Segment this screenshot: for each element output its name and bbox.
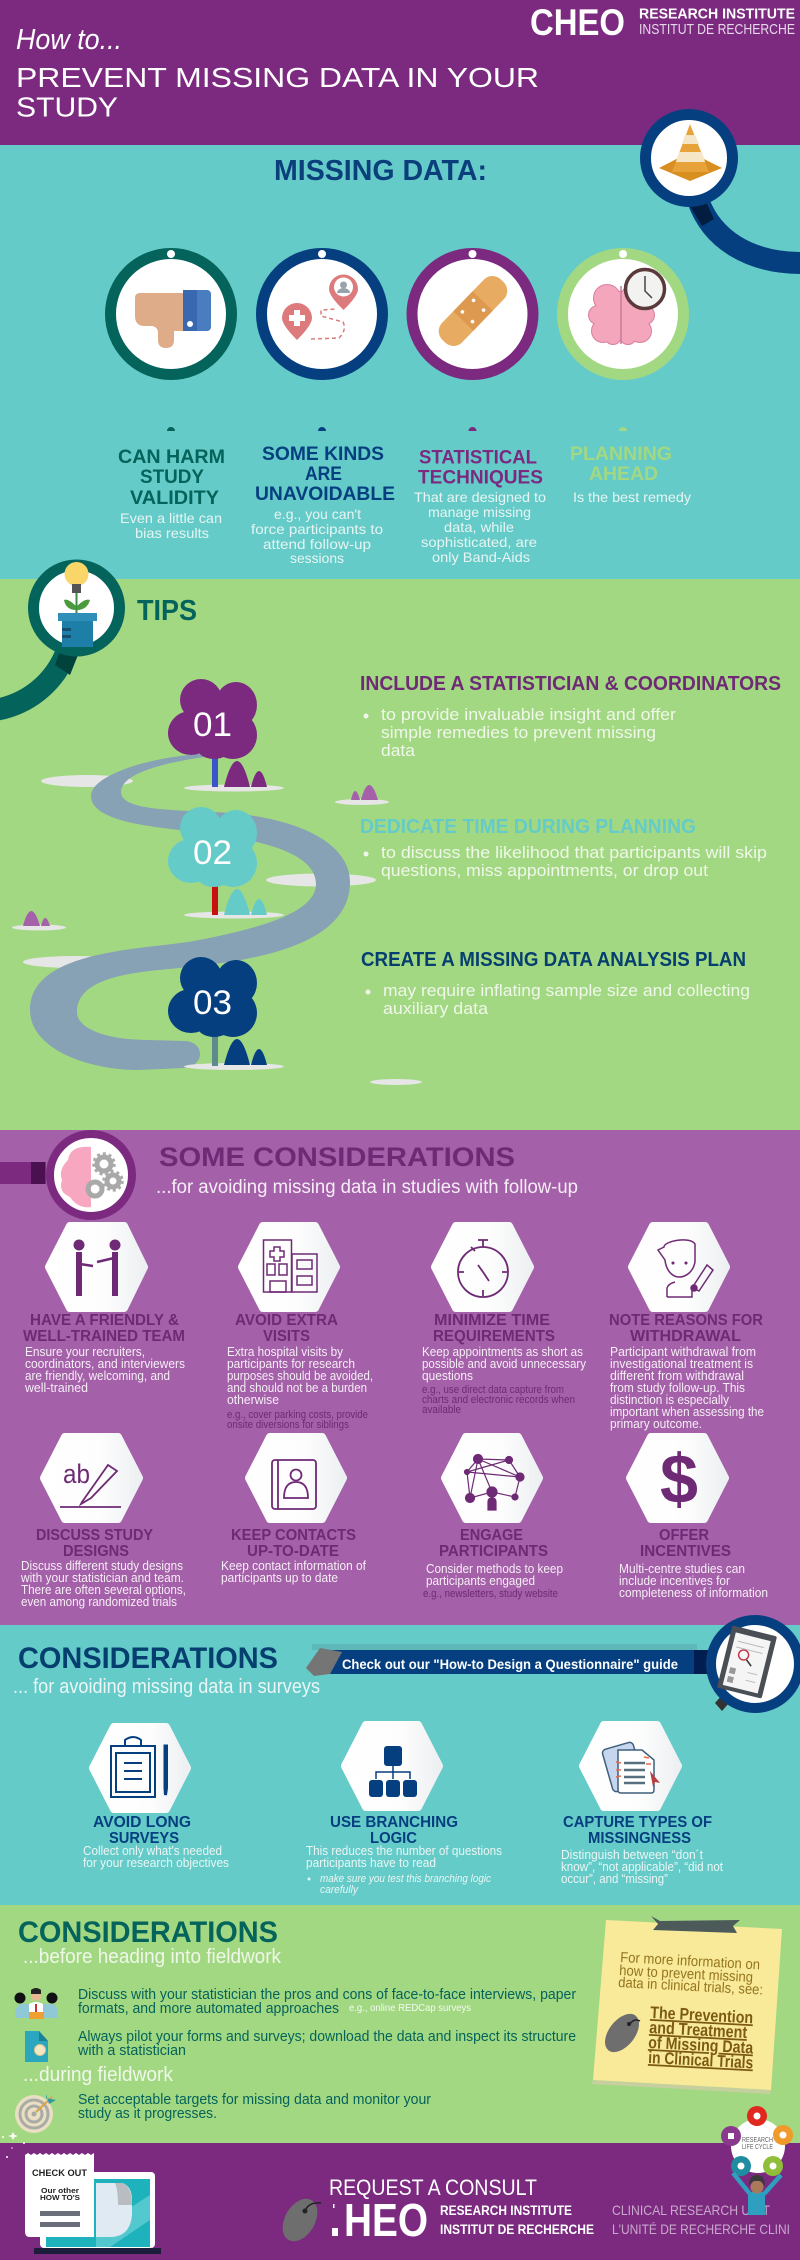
label: some kinds: ARE bbox=[305, 464, 342, 485]
text: that are designed: only Band-Aids bbox=[432, 549, 530, 565]
card: discuss study designs: with your statistician and team. bbox=[20, 1570, 184, 1585]
text: pilot forms: with a statistician bbox=[77, 2043, 186, 2059]
card: avoid long surveys: AVOID LONG bbox=[93, 1814, 191, 1831]
text: even a little bbox=[120, 510, 222, 541]
card: offer incentives: OFFER bbox=[659, 1527, 709, 1544]
card: keep contacts bbox=[221, 1437, 366, 1585]
text: e.g. you can't: sessions bbox=[290, 550, 344, 566]
icon: brain gears badge bbox=[0, 1134, 132, 1216]
tip 1 text: simple remedies to prevent missing bbox=[381, 723, 656, 742]
text: even a little: Even a little can bbox=[120, 510, 222, 526]
heading: some considerations: SOME CONSIDERATIONS bbox=[159, 1142, 515, 1172]
subheading: surveys: ... for avoiding missing data in surveys bbox=[13, 1676, 320, 1698]
heading: request a consult: REQUEST A CONSULT bbox=[329, 2175, 537, 2200]
banner: questionnaire guide bbox=[306, 1644, 709, 1676]
logo: CHEO research institute: CHEO bbox=[530, 2, 625, 43]
card: reasons for withdrawal: Participant withdrawal from bbox=[610, 1344, 756, 1359]
icon: contact book bbox=[272, 1460, 316, 1509]
card: use branching logic: This reduces the number of questions bbox=[306, 1843, 502, 1858]
tip 3 text bbox=[361, 949, 750, 1018]
text: that are designed bbox=[414, 489, 546, 565]
card: use branching logic: USE BRANCHING bbox=[330, 1814, 458, 1831]
sticky note: of Missing Data bbox=[648, 2033, 754, 2058]
card: discuss study designs: There are often several options, bbox=[21, 1582, 186, 1597]
sticky note: and Treatment bbox=[649, 2018, 748, 2042]
tip 1 text: to provide invaluable insight and offer bbox=[381, 705, 676, 724]
title: main heading: PREVENT MISSING DATA IN YOUR bbox=[16, 62, 539, 93]
heading: considerations: CONSIDERATIONS bbox=[18, 1916, 278, 1949]
icon: location pins bbox=[282, 274, 358, 340]
icon: ab and pencil: ab bbox=[63, 1459, 90, 1489]
card: offer incentives: include incentives for bbox=[619, 1573, 731, 1588]
card: engage participants: ENGAGE bbox=[460, 1527, 523, 1544]
icon: band-aid bbox=[434, 271, 512, 351]
card: minimize time: MINIMIZE TIME bbox=[434, 1312, 550, 1329]
card: discuss study designs: even among randomized trials bbox=[21, 1594, 177, 1609]
icon: document stack bbox=[602, 1741, 660, 1793]
text: that are designed: manage missing bbox=[428, 504, 531, 520]
text: best remedy: Is the best remedy bbox=[573, 489, 691, 505]
card: friendly team: HAVE A FRIENDLY & bbox=[30, 1312, 179, 1329]
text: acceptable targets bbox=[78, 2092, 431, 2122]
tree 03 bbox=[168, 957, 284, 1070]
sticky note: The Prevention bbox=[650, 2003, 754, 2027]
card: minimize time bbox=[422, 1226, 586, 1416]
tree 03: 03 bbox=[193, 984, 232, 1022]
heading: missing data: MISSING DATA: bbox=[274, 155, 487, 187]
icon: research life cycle bbox=[721, 2106, 793, 2215]
card: avoid extra visits: participants for research bbox=[227, 1356, 355, 1371]
text: discuss with statistician: formats, and more automated approaches bbox=[78, 2001, 339, 2017]
card: avoid long surveys: for your research objectives bbox=[83, 1855, 229, 1870]
label: some kinds: SOME KINDS bbox=[262, 444, 384, 465]
card: engage participants: PARTICIPANTS bbox=[439, 1543, 548, 1560]
icon: document bbox=[25, 2031, 48, 2062]
card: avoid extra visits: and should not be a burden bbox=[227, 1380, 367, 1395]
icon: laptop and receipt bbox=[25, 2153, 161, 2254]
text: research institute bbox=[440, 2202, 594, 2237]
icon: mouse bbox=[276, 2193, 324, 2247]
icon: stopwatch bbox=[458, 1240, 508, 1297]
card: minimize time: Keep appointments as short as bbox=[422, 1344, 583, 1359]
card: minimize time: questions bbox=[422, 1368, 473, 1383]
icon: three people bbox=[14, 1988, 58, 2019]
title: how to: How to... bbox=[16, 24, 122, 56]
icon: target bbox=[15, 2094, 56, 2133]
text: discuss with statistician: Discuss with your statistician the pros and cons of face-to-face interviews, paper bbox=[78, 1987, 576, 2003]
icon: plant badge bbox=[0, 562, 120, 710]
card: avoid extra visits: AVOID EXTRA bbox=[235, 1312, 338, 1329]
card: capture types of missingness: know”, “not applicable”, “did not bbox=[561, 1859, 723, 1874]
label: can harm: CAN HARM bbox=[118, 447, 225, 468]
card: engage participants: e.g., newsletters, study website bbox=[423, 1588, 558, 1600]
icon: hospital bbox=[264, 1240, 317, 1292]
card: minimize time: possible and avoid unnecessary bbox=[422, 1356, 586, 1371]
card: discuss study designs bbox=[20, 1437, 186, 1609]
item: planning ahead bbox=[562, 250, 691, 505]
label: can harm: VALIDITY bbox=[130, 488, 219, 509]
label: can harm bbox=[118, 447, 225, 509]
card: offer incentives: INCENTIVES bbox=[640, 1543, 731, 1560]
icon: brain and clock bbox=[589, 270, 664, 344]
icon: traffic cone badge bbox=[646, 114, 800, 263]
card: capture types of missingness: Distinguish between “don´t bbox=[561, 1847, 703, 1862]
card: reasons for withdrawal: from study follow-up. This bbox=[610, 1380, 745, 1395]
text: e.g. you can't bbox=[251, 506, 383, 566]
card: reasons for withdrawal: WITHDRAWAL bbox=[630, 1328, 741, 1345]
text: pilot forms bbox=[77, 2029, 576, 2059]
card: reasons for withdrawal bbox=[609, 1226, 764, 1431]
item: can harm study validity bbox=[110, 250, 232, 541]
card: keep contacts: UP-TO-DATE bbox=[247, 1543, 339, 1560]
text: that are designed: sophisticated, are bbox=[421, 534, 537, 550]
tip 1 text: INCLUDE A STATISTICIAN & COORDINATORS bbox=[360, 673, 781, 695]
card: capture types of missingness: CAPTURE TYPES OF bbox=[563, 1814, 712, 1831]
icon: dollar sign: $ bbox=[660, 1440, 698, 1518]
text: e.g. you can't: force participants to bbox=[251, 521, 383, 537]
panel: tips bbox=[0, 562, 800, 1130]
tip 2 text bbox=[360, 816, 767, 880]
card: friendly team: well-trained bbox=[24, 1380, 88, 1395]
label: some kinds bbox=[255, 444, 395, 505]
card: avoid long surveys: Collect only what's needed bbox=[83, 1843, 222, 1858]
panel: missing data bbox=[0, 114, 800, 579]
card: reasons for withdrawal: NOTE REASONS FOR bbox=[609, 1312, 763, 1329]
card: keep contacts: KEEP CONTACTS bbox=[231, 1527, 356, 1544]
text: research institute: RESEARCH INSTITUTE bbox=[440, 2202, 572, 2218]
text: discuss with statistician bbox=[78, 1987, 576, 2017]
logo: CHEO research institute bbox=[530, 2, 795, 43]
label: planning ahead: PLANNING bbox=[570, 444, 672, 465]
card: engage participants bbox=[423, 1437, 563, 1600]
card: capture types of missingness: occur”, and “missing” bbox=[561, 1871, 668, 1886]
card: reasons for withdrawal: different from withdrawal bbox=[610, 1368, 744, 1383]
title: main heading: STUDY bbox=[16, 92, 118, 122]
card: engage participants: Consider methods to keep bbox=[426, 1561, 563, 1576]
card: friendly team: Ensure your recruiters, bbox=[25, 1344, 145, 1359]
sticky note: data in clinical trials, see: bbox=[618, 1975, 763, 1999]
icon: clipboard badge bbox=[711, 1620, 799, 1711]
small bushes bbox=[23, 785, 378, 926]
tip 3 text: CREATE A MISSING DATA ANALYSIS PLAN bbox=[361, 949, 746, 971]
card: avoid long surveys: SURVEYS bbox=[109, 1830, 179, 1847]
card: capture types of missingness: MISSINGNESS bbox=[588, 1830, 691, 1847]
card: use branching logic bbox=[306, 1725, 502, 1896]
subheading: before heading: ...before heading into fieldwork bbox=[23, 1946, 282, 1968]
title: main heading bbox=[16, 62, 539, 122]
card: discuss study designs: Discuss different study designs bbox=[21, 1558, 183, 1573]
subheading: during fieldwork: ...during fieldwork bbox=[23, 2064, 174, 2086]
tip 2 text: DEDICATE TIME DURING PLANNING bbox=[360, 816, 696, 838]
label: statistical techniques: TECHNIQUES bbox=[418, 468, 543, 488]
card: reasons for withdrawal: distinction is especially bbox=[610, 1392, 729, 1407]
card: use branching logic: participants have to read bbox=[306, 1855, 436, 1870]
sticky note: in Clinical Trials bbox=[648, 2048, 754, 2072]
icon: laptop and receipt: HOW TO'S bbox=[40, 2193, 80, 2202]
tip 1 text bbox=[360, 673, 781, 760]
sticky note bbox=[592, 1916, 782, 2094]
card: avoid extra visits: purposes should be avoided, bbox=[227, 1368, 373, 1383]
tip 3 text: auxiliary data bbox=[383, 999, 489, 1018]
subheading: ...for avoiding missing data in studies with follow-up bbox=[156, 1177, 578, 1198]
icon: org chart bbox=[369, 1746, 417, 1797]
tip 2 text: questions, miss appointments, or drop out bbox=[381, 861, 708, 880]
text: even a little: bias results bbox=[135, 525, 209, 541]
icon: network bbox=[464, 1454, 524, 1510]
card: offer incentives: completeness of information bbox=[619, 1585, 768, 1600]
card: offer incentives: Multi-centre studies can bbox=[619, 1561, 745, 1576]
text: e.g. you can't: e.g., you can't bbox=[274, 506, 361, 522]
card: minimize time: charts and electronic records when bbox=[422, 1394, 575, 1406]
tip 1 text: data bbox=[381, 741, 416, 760]
card: avoid long surveys bbox=[83, 1727, 229, 1870]
text: e.g. you can't: attend follow-up bbox=[263, 536, 371, 552]
icon: two people bbox=[74, 1240, 120, 1296]
text: pilot forms: Always pilot your forms and surveys; download the data and inspect its structure bbox=[78, 2029, 576, 2045]
card: discuss study designs: DESIGNS bbox=[63, 1543, 129, 1560]
label: some kinds: UNAVOIDABLE bbox=[255, 484, 395, 505]
card: use branching logic: LOGIC bbox=[370, 1830, 417, 1847]
icon: laptop and receipt: Our other bbox=[41, 2186, 79, 2195]
tree 01 bbox=[168, 679, 284, 792]
tip 2 text: to discuss the likelihood that participants will skip bbox=[381, 843, 767, 862]
label: statistical techniques bbox=[418, 448, 543, 488]
card: reasons for withdrawal: investigational treatment is bbox=[610, 1356, 753, 1371]
text: online REDCap: e.g., online REDCap surveys bbox=[349, 2002, 471, 2014]
item: statistical techniques bbox=[412, 250, 546, 565]
card: friendly team: are friendly, welcoming, and bbox=[25, 1368, 170, 1383]
tree 01: 01 bbox=[193, 706, 232, 744]
icon: research life cycle: LIFE CYCLE bbox=[742, 2142, 773, 2151]
card: friendly team bbox=[23, 1226, 185, 1395]
card: avoid extra visits: onsite diversions for siblings bbox=[227, 1419, 349, 1431]
banner: questionnaire guide: Check out our "How-to Design a Questionnaire" guide bbox=[342, 1656, 678, 1672]
label: planning ahead: AHEAD bbox=[589, 464, 658, 485]
tree 02: 02 bbox=[193, 834, 232, 872]
card: discuss study designs: DISCUSS STUDY bbox=[36, 1527, 153, 1544]
icon: laptop and receipt: CHECK OUT bbox=[32, 2168, 88, 2178]
text: acceptable targets: study as it progresses. bbox=[78, 2106, 217, 2122]
card: avoid extra visits: e.g., cover parking costs, provide bbox=[227, 1409, 368, 1421]
card: avoid extra visits: otherwise bbox=[227, 1392, 279, 1407]
sparkles bbox=[2, 2132, 25, 2158]
text: clinical research unit: CLINICAL RESEARCH UNIT bbox=[612, 2202, 770, 2218]
panel: fieldwork considerations bbox=[0, 1905, 800, 2143]
icon: ab and pencil bbox=[60, 1459, 121, 1507]
label: planning ahead bbox=[570, 444, 672, 485]
road bbox=[30, 754, 350, 1070]
panel: header bbox=[0, 0, 800, 145]
card: use branching logic: carefully bbox=[320, 1884, 359, 1896]
tip 3 text: may require inflating sample size and collecting bbox=[383, 981, 750, 1000]
card: reasons for withdrawal: primary outcome. bbox=[610, 1416, 702, 1431]
card: engage participants: participants engaged bbox=[426, 1573, 535, 1588]
card: minimize time: available bbox=[422, 1404, 461, 1416]
tree 02 bbox=[168, 807, 284, 918]
heading: considerations: CONSIDERATIONS bbox=[18, 1642, 278, 1675]
text: that are designed: data, while bbox=[444, 519, 514, 535]
card: reasons for withdrawal: important when assessing the bbox=[610, 1404, 764, 1419]
text: acceptable targets: Set acceptable targets for missing data and monitor your bbox=[78, 2092, 431, 2108]
label: statistical techniques: STATISTICAL bbox=[419, 448, 537, 468]
text: research institute: INSTITUT DE RECHERCHE bbox=[440, 2221, 594, 2237]
logo: CHEO research institute: RESEARCH INSTITUTE bbox=[639, 6, 795, 22]
card: avoid extra visits bbox=[227, 1226, 373, 1431]
sticky note: how to prevent missing bbox=[619, 1963, 753, 1986]
card: offer incentives bbox=[619, 1437, 768, 1600]
card: keep contacts: Keep contact information of bbox=[221, 1558, 366, 1573]
sticky note: For more information on bbox=[620, 1950, 760, 1973]
card: friendly team: WELL-TRAINED TEAM bbox=[23, 1328, 185, 1345]
text: clinical research unit bbox=[612, 2202, 790, 2237]
icon: research life cycle: RESEARCH bbox=[742, 2135, 773, 2144]
icon: thumbs down bbox=[135, 290, 211, 348]
card: friendly team: coordinators, and interviewers bbox=[25, 1356, 185, 1371]
card: use branching logic: make sure you test this branching logic bbox=[320, 1873, 491, 1885]
icon: clipboard bbox=[111, 1737, 166, 1797]
icon: man with pencil bbox=[658, 1240, 713, 1297]
card: avoid extra visits: Extra hospital visits by bbox=[227, 1344, 343, 1359]
card: keep contacts: participants up to date bbox=[221, 1570, 338, 1585]
heading: tips: TIPS bbox=[137, 595, 197, 627]
logo: clipped CHEO: HEO bbox=[344, 2194, 428, 2246]
card: minimize time: e.g., use direct data capture from bbox=[422, 1384, 564, 1396]
panel: survey considerations bbox=[0, 1620, 800, 1905]
card: avoid extra visits: VISITS bbox=[263, 1328, 310, 1345]
label: can harm: STUDY bbox=[140, 467, 204, 488]
panel: some considerations bbox=[0, 1130, 800, 1625]
item: some kinds are unavoidable bbox=[251, 250, 395, 566]
ground patches bbox=[12, 775, 422, 1085]
icon: mouse bbox=[598, 2008, 646, 2058]
panel: footer bbox=[0, 2106, 800, 2260]
card: capture types of missingness bbox=[561, 1725, 723, 1886]
text: that are designed: That are designed to bbox=[414, 489, 546, 505]
card: minimize time: REQUIREMENTS bbox=[433, 1328, 555, 1345]
